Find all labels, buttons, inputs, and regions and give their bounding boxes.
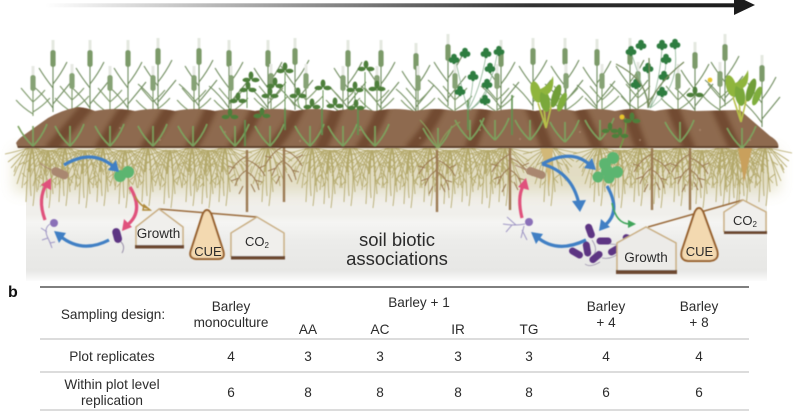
row: plot replicates: Plot replicates xyxy=(69,349,155,364)
arrow: blue right xyxy=(604,186,614,226)
arrow: blue bottom xyxy=(60,236,109,246)
header row: Barley xyxy=(212,299,250,314)
row: within plot level replication: replication xyxy=(81,393,143,408)
row: plot replicates: 4 xyxy=(227,349,235,364)
microbe: brown xyxy=(515,165,547,180)
row: plot replicates: 3 xyxy=(454,349,462,364)
sampling design table xyxy=(40,287,749,410)
label: CUE: CUE xyxy=(686,244,714,259)
caption: soil biotic associations xyxy=(346,229,448,269)
label: CO2: CO xyxy=(733,213,753,228)
caption: soil biotic associations: associations xyxy=(346,248,448,269)
row: within plot level replication: 6 xyxy=(602,385,610,400)
arrow: pink right xyxy=(126,187,137,226)
arrow: blue top xyxy=(542,156,590,165)
row: within plot level replication: 8 xyxy=(304,385,312,400)
CO2 pan xyxy=(231,217,285,260)
header row: Barley + 1 xyxy=(388,295,450,310)
arrow: blue bottom xyxy=(537,237,586,246)
header row: IR xyxy=(451,322,465,337)
scale beam xyxy=(159,209,257,217)
arrow: blue top xyxy=(64,157,114,167)
microbe cluster: green xyxy=(592,152,623,184)
growth pan xyxy=(616,227,677,274)
panel label b: b xyxy=(8,284,18,301)
roots xyxy=(5,140,792,212)
barley row xyxy=(16,34,780,127)
CUE fulcrum xyxy=(190,210,224,259)
row: within plot level replication: 8 xyxy=(376,385,384,400)
row: within plot level replication xyxy=(64,377,703,408)
arrow: pink left xyxy=(41,184,47,220)
arrow: blue middle xyxy=(542,164,579,204)
arrow head xyxy=(572,200,586,212)
header row: Barley xyxy=(587,299,625,314)
row: plot replicates: 3 xyxy=(304,349,312,364)
header row: + 4 xyxy=(596,315,616,330)
microbe: green xyxy=(114,166,134,182)
arrow head xyxy=(628,220,636,228)
header row: TG xyxy=(520,322,538,337)
microbe: brown xyxy=(40,163,70,181)
row: plot replicates: 3 xyxy=(525,349,533,364)
row: plot replicates xyxy=(69,349,703,364)
row: plot replicates: 4 xyxy=(602,349,610,364)
arrow head xyxy=(599,219,610,231)
soil bed xyxy=(16,106,780,149)
header row: AC xyxy=(371,322,390,337)
label: CUE: CUE xyxy=(194,244,222,259)
label: Growth: Growth xyxy=(624,250,668,265)
above-ground plants xyxy=(10,34,790,150)
clover plants xyxy=(449,39,680,110)
header row: AA xyxy=(299,322,318,337)
row: within plot level replication: 8 xyxy=(454,385,462,400)
arrow: pink xyxy=(520,186,523,218)
arrow head xyxy=(108,160,119,172)
bright broadleaf plants xyxy=(528,58,764,148)
header row: monoculture xyxy=(194,315,268,330)
diagram: left CUE cycle xyxy=(40,157,285,260)
arrow head xyxy=(584,158,596,170)
microbe cluster: purple xyxy=(568,223,638,266)
CO2 pan xyxy=(724,200,767,234)
CUE fulcrum xyxy=(681,208,718,261)
arrow head xyxy=(54,231,66,243)
arrow head xyxy=(518,178,529,190)
row: within plot level replication: 6 xyxy=(695,385,703,400)
arrow head xyxy=(531,232,543,244)
label: CO2: 2 xyxy=(265,241,270,250)
caption: soil biotic associations: soil biotic xyxy=(359,229,435,250)
growth pan xyxy=(135,209,184,248)
row: plot replicates: 3 xyxy=(376,349,384,364)
arrow: tan to growth xyxy=(135,196,150,210)
scale beam xyxy=(648,200,743,227)
diagram: right CUE cycle xyxy=(503,152,767,274)
gradient arrow xyxy=(45,0,755,15)
row: within plot level replication: 6 xyxy=(227,385,235,400)
row: within plot level replication: 8 xyxy=(525,385,533,400)
label: CO2: CO xyxy=(245,234,265,249)
arrow head xyxy=(41,178,51,190)
header row: Barley xyxy=(680,299,718,314)
row: plot replicates: 4 xyxy=(695,349,703,364)
arrow head xyxy=(122,219,132,231)
microbe: purple xyxy=(111,227,124,253)
row: within plot level replication: Within plot level xyxy=(64,377,160,392)
seedlings xyxy=(18,95,756,148)
label: CO2: 2 xyxy=(753,220,758,229)
alfalfa plants xyxy=(222,60,386,119)
fungus xyxy=(41,219,58,248)
label: Growth: Growth xyxy=(137,226,180,241)
header row: Sampling design: xyxy=(61,307,165,322)
fungus xyxy=(503,217,533,240)
header row: + 8 xyxy=(689,315,709,330)
header row xyxy=(61,295,718,337)
panel: below-ground soil background xyxy=(26,148,767,281)
arrow: green xyxy=(612,203,630,224)
